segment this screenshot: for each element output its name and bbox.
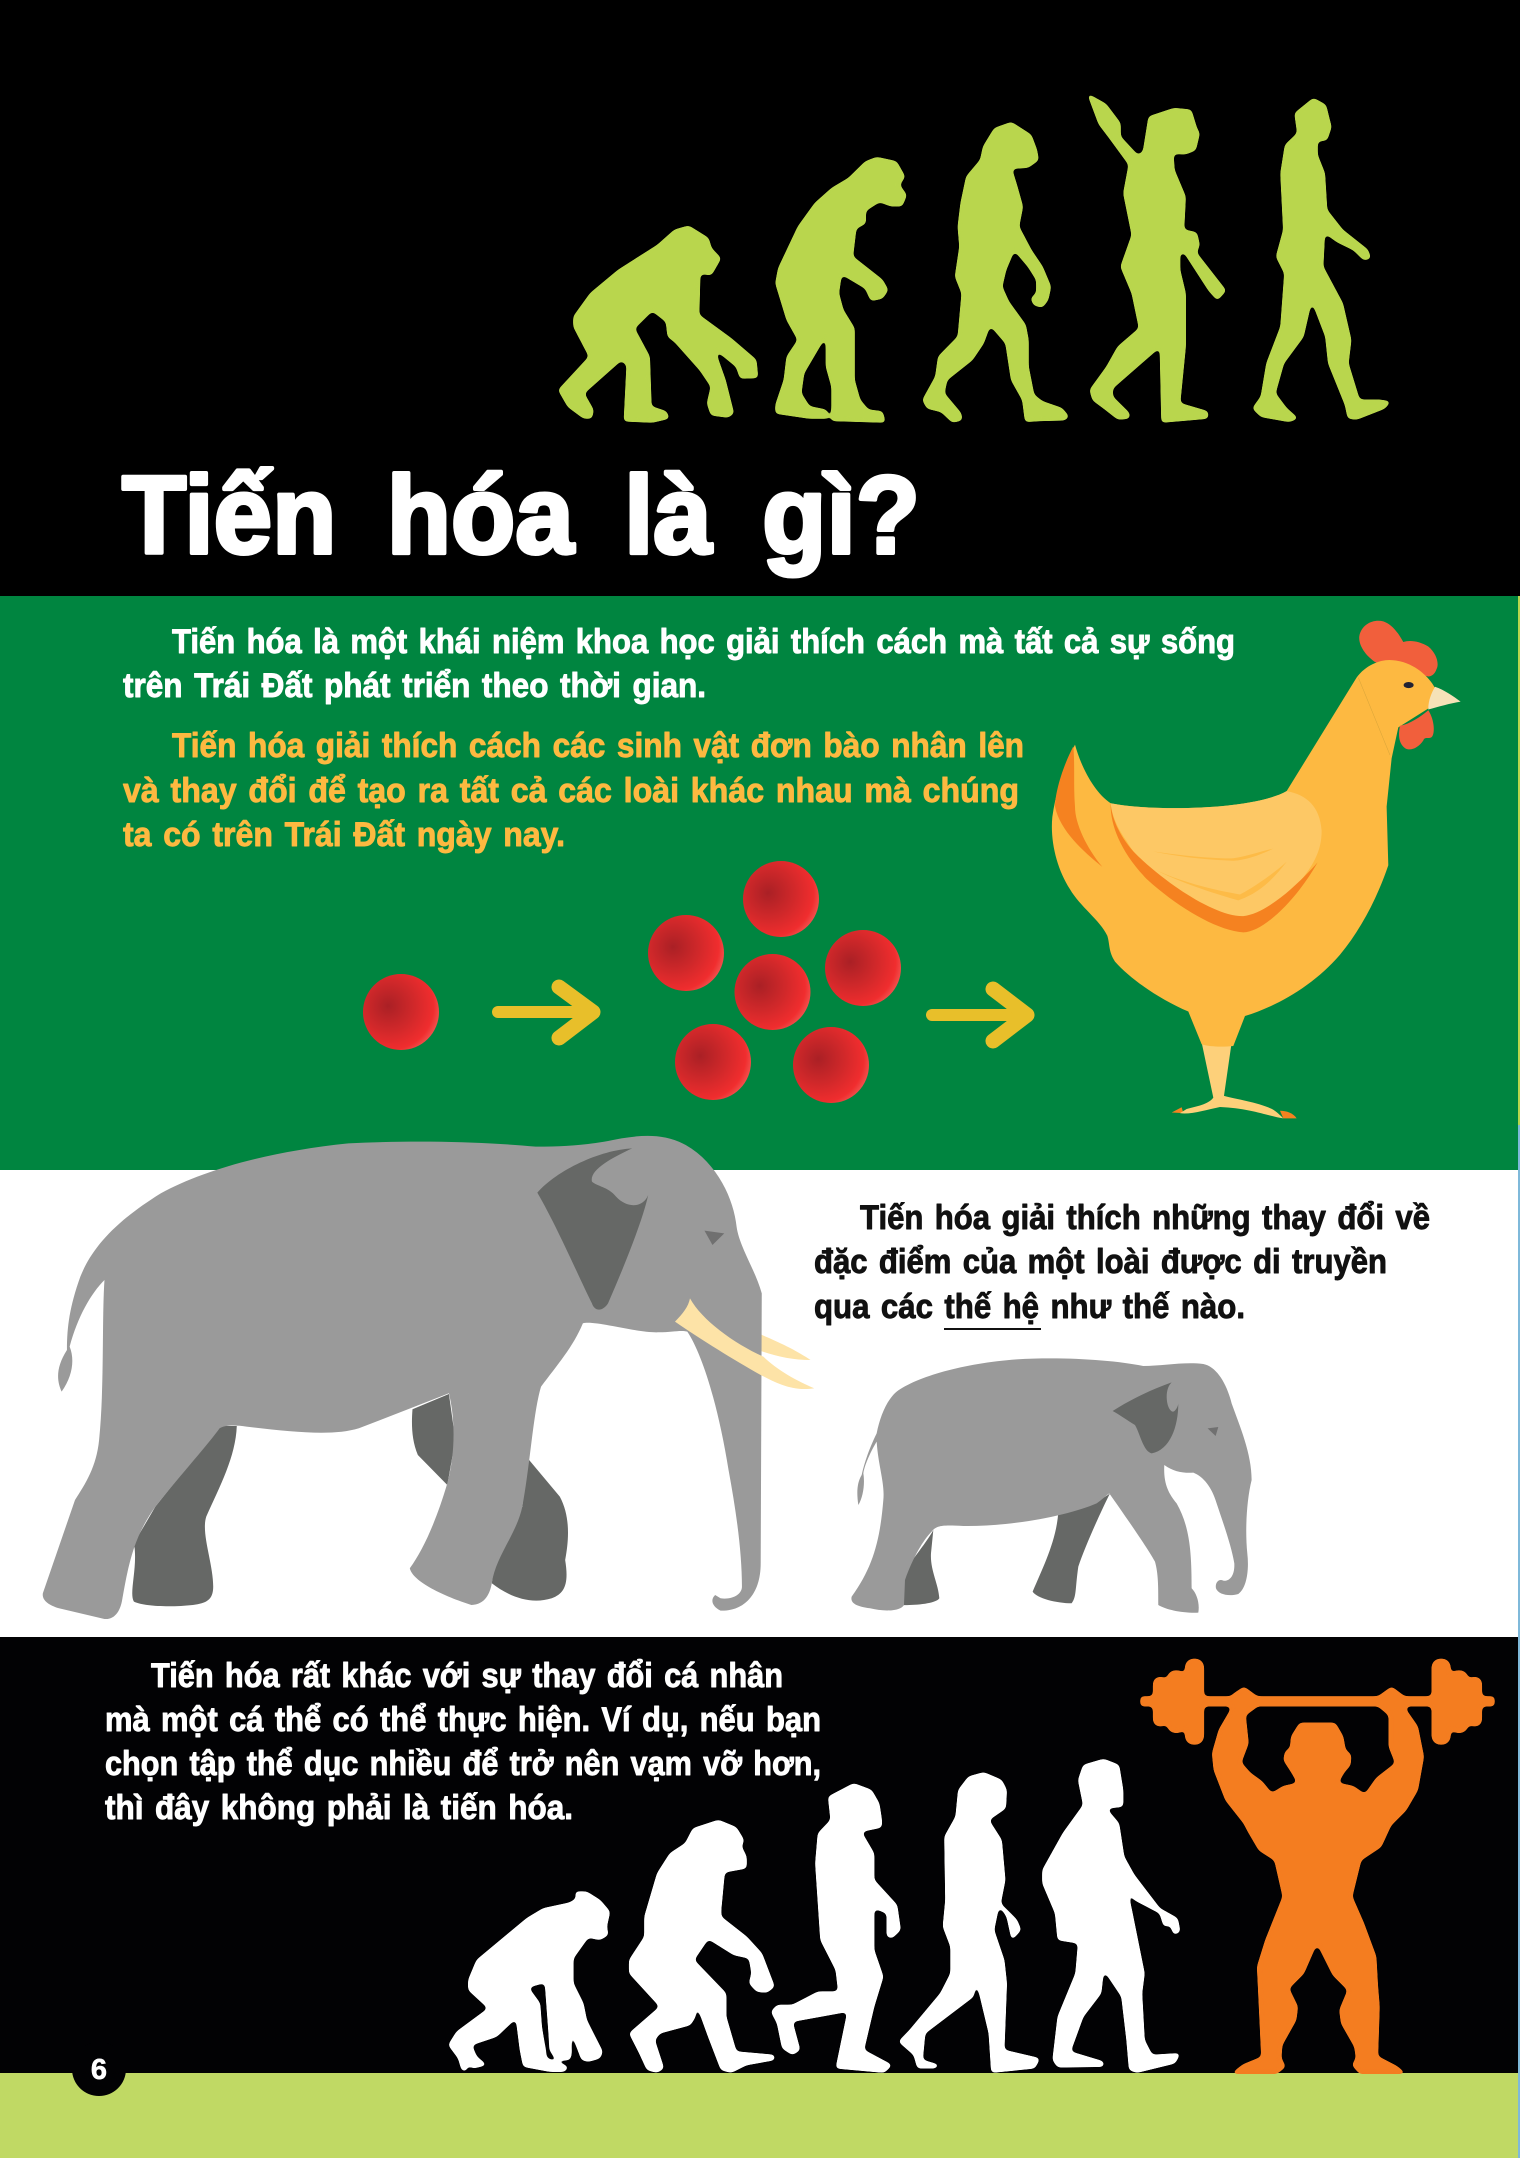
text block: white intro paragraph: Tiến hóa là một khái niệm khoa học giải thích cách mà tất cả sự sống	[172, 623, 1235, 661]
far legs	[902, 1493, 1110, 1605]
page number badge	[72, 2042, 126, 2096]
text block: yellow paragraph: ta có trên Trái Đất ngày nay.	[123, 816, 565, 854]
text block: yellow paragraph	[123, 727, 1024, 854]
standing figures group	[629, 1759, 1180, 2073]
chicken wattle	[1399, 710, 1434, 749]
elephant body	[851, 1358, 1252, 1613]
icon: chicken	[1052, 621, 1461, 1118]
text block: individual change paragraph: thì đây không phải là tiến hóa.	[105, 1789, 573, 1827]
text block: individual change paragraph: Tiến hóa rất khác với sự thay đổi cá nhân	[151, 1657, 783, 1695]
stooped figure	[629, 1820, 775, 2073]
right page edge	[1518, 596, 1520, 2158]
chicken beak	[1428, 687, 1461, 710]
arrow: cells to chicken	[932, 989, 1027, 1041]
icon: group of six cells	[648, 861, 901, 1103]
text block: individual change paragraph: mà một cá thể có thể thực hiện. Ví dụ, nếu bạn	[105, 1701, 821, 1739]
chicken wing band	[1111, 803, 1318, 932]
far tusk	[758, 1333, 811, 1360]
icon: large elephant	[43, 1136, 814, 1619]
chicken wing	[1111, 791, 1322, 917]
stooped hominid figure	[776, 157, 906, 422]
underline: thế hệ	[944, 1328, 1041, 1330]
panel: white section	[0, 1170, 1520, 1637]
page number badge: 6	[91, 2054, 107, 2086]
modern human figure	[1253, 98, 1390, 422]
text block: elephant paragraph	[814, 1199, 1430, 1326]
chicken eye	[1404, 682, 1414, 688]
title: Tiến hóa là gì?	[122, 454, 920, 577]
text block: yellow paragraph: Tiến hóa giải thích cách các sinh vật đơn bào nhân lên	[172, 727, 1024, 765]
barbell	[1140, 1658, 1495, 1745]
near tusk	[675, 1298, 814, 1389]
far legs	[132, 1394, 568, 1606]
chicken body	[1052, 660, 1435, 1047]
crouching ape figure	[448, 1892, 610, 2072]
text block: elephant paragraph: qua các thế hệ như thế nào.	[814, 1288, 1245, 1326]
elephant ear	[1113, 1382, 1178, 1453]
elephant eye	[704, 1231, 724, 1245]
elephant ear	[537, 1148, 648, 1310]
muscular body	[1213, 1687, 1423, 2073]
walking hominid figure	[771, 1783, 901, 2073]
text block: white intro paragraph: trên Trái Đất phát triển theo thời gian.	[123, 667, 706, 705]
icon: single cell	[363, 974, 439, 1050]
ape figure	[559, 226, 758, 422]
icon: white evolution silhouettes	[448, 1759, 1180, 2073]
panel: top black header	[0, 0, 1520, 596]
chicken toes	[1172, 1107, 1297, 1118]
elephant eye	[1208, 1427, 1218, 1436]
chicken wing feathers	[1153, 849, 1287, 900]
chicken leg	[1180, 1043, 1283, 1118]
icon: small elephant	[851, 1358, 1252, 1613]
panel: green section	[0, 596, 1520, 1170]
long-haired figure	[899, 1772, 1040, 2073]
text block: elephant paragraph: Tiến hóa giải thích những thay đổi về	[860, 1199, 1430, 1237]
arrow: cell to cells	[498, 987, 593, 1038]
modern man figure	[1042, 1759, 1180, 2073]
man with spear figure	[1088, 94, 1226, 422]
chicken comb	[1359, 621, 1438, 676]
elephant body	[43, 1136, 762, 1619]
panel: lime ground strip	[0, 2073, 1520, 2158]
text block: white intro paragraph	[123, 623, 1235, 705]
text block: individual change paragraph: chọn tập thể dục nhiều để trở nên vạm vỡ hơn,	[105, 1745, 821, 1783]
text block: individual change paragraph	[105, 1657, 821, 1827]
upright hominid figure	[923, 122, 1069, 422]
chicken tail feather	[1055, 746, 1102, 867]
text block: yellow paragraph: và thay đổi để tạo ra tất cả các loài khác nhau mà chúng	[123, 772, 1019, 810]
icon: orange weightlifter	[1140, 1658, 1495, 2073]
chicken neck line	[1358, 677, 1390, 755]
panel: lower black section	[0, 1637, 1520, 2073]
text block: elephant paragraph: đặc điểm của một loài được di truyền	[814, 1243, 1387, 1281]
icon: green evolution silhouettes	[559, 94, 1390, 422]
